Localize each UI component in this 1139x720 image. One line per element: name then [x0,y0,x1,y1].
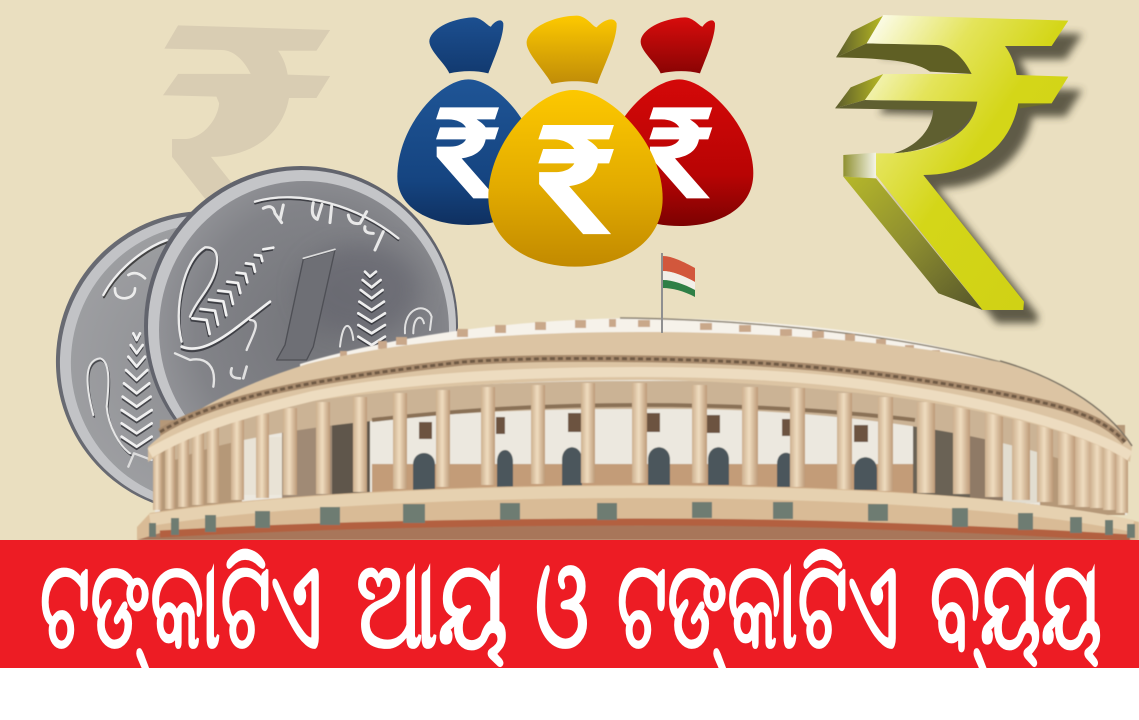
coin: left sheaf [180,250,218,344]
rupee on red bag [649,107,712,198]
parliament: colonnade interior [155,378,1127,515]
icon: Indian flag [661,253,695,333]
headline text: ବ୍ୟୟ [930,537,1102,683]
parliament: columns [153,383,1128,513]
parliament: parapet [300,318,1010,376]
building: Parliament House [137,318,1139,540]
headline text: ଟଙ୍କାଟିଏ [40,537,322,683]
parliament: balustrade panels [149,502,1135,538]
icon: 3D gold rupee [835,15,1082,323]
parliament: cornice [148,332,1132,462]
coin: right wheat [358,274,385,347]
parliament: windows [413,447,877,490]
icon: faded rupee watermark [163,25,330,268]
rupee on blue bag [436,107,499,198]
icon: red money bag [603,17,753,226]
coin: legend arc and letters [255,199,398,240]
icon: front coin [144,166,458,486]
back coin: wheat [122,336,152,449]
background [0,0,1139,540]
headline text: ଆୟ [356,537,508,674]
headline banner [0,537,1139,683]
back coin: curl [89,360,131,455]
coin: numeral one [277,250,335,360]
headline text: ଓ [535,537,589,674]
footer strip [0,668,1139,720]
back coin: legend [104,242,167,297]
headline text: ଟଙ୍କାଟିଏ [617,537,899,683]
headline text [40,537,1102,683]
icon: blue money bag [397,17,540,225]
icon: yellow money bag [488,16,663,267]
rupee on yellow bag [538,125,614,234]
parliament: balustrade and base [137,485,1139,540]
icon: back coin [22,177,390,547]
